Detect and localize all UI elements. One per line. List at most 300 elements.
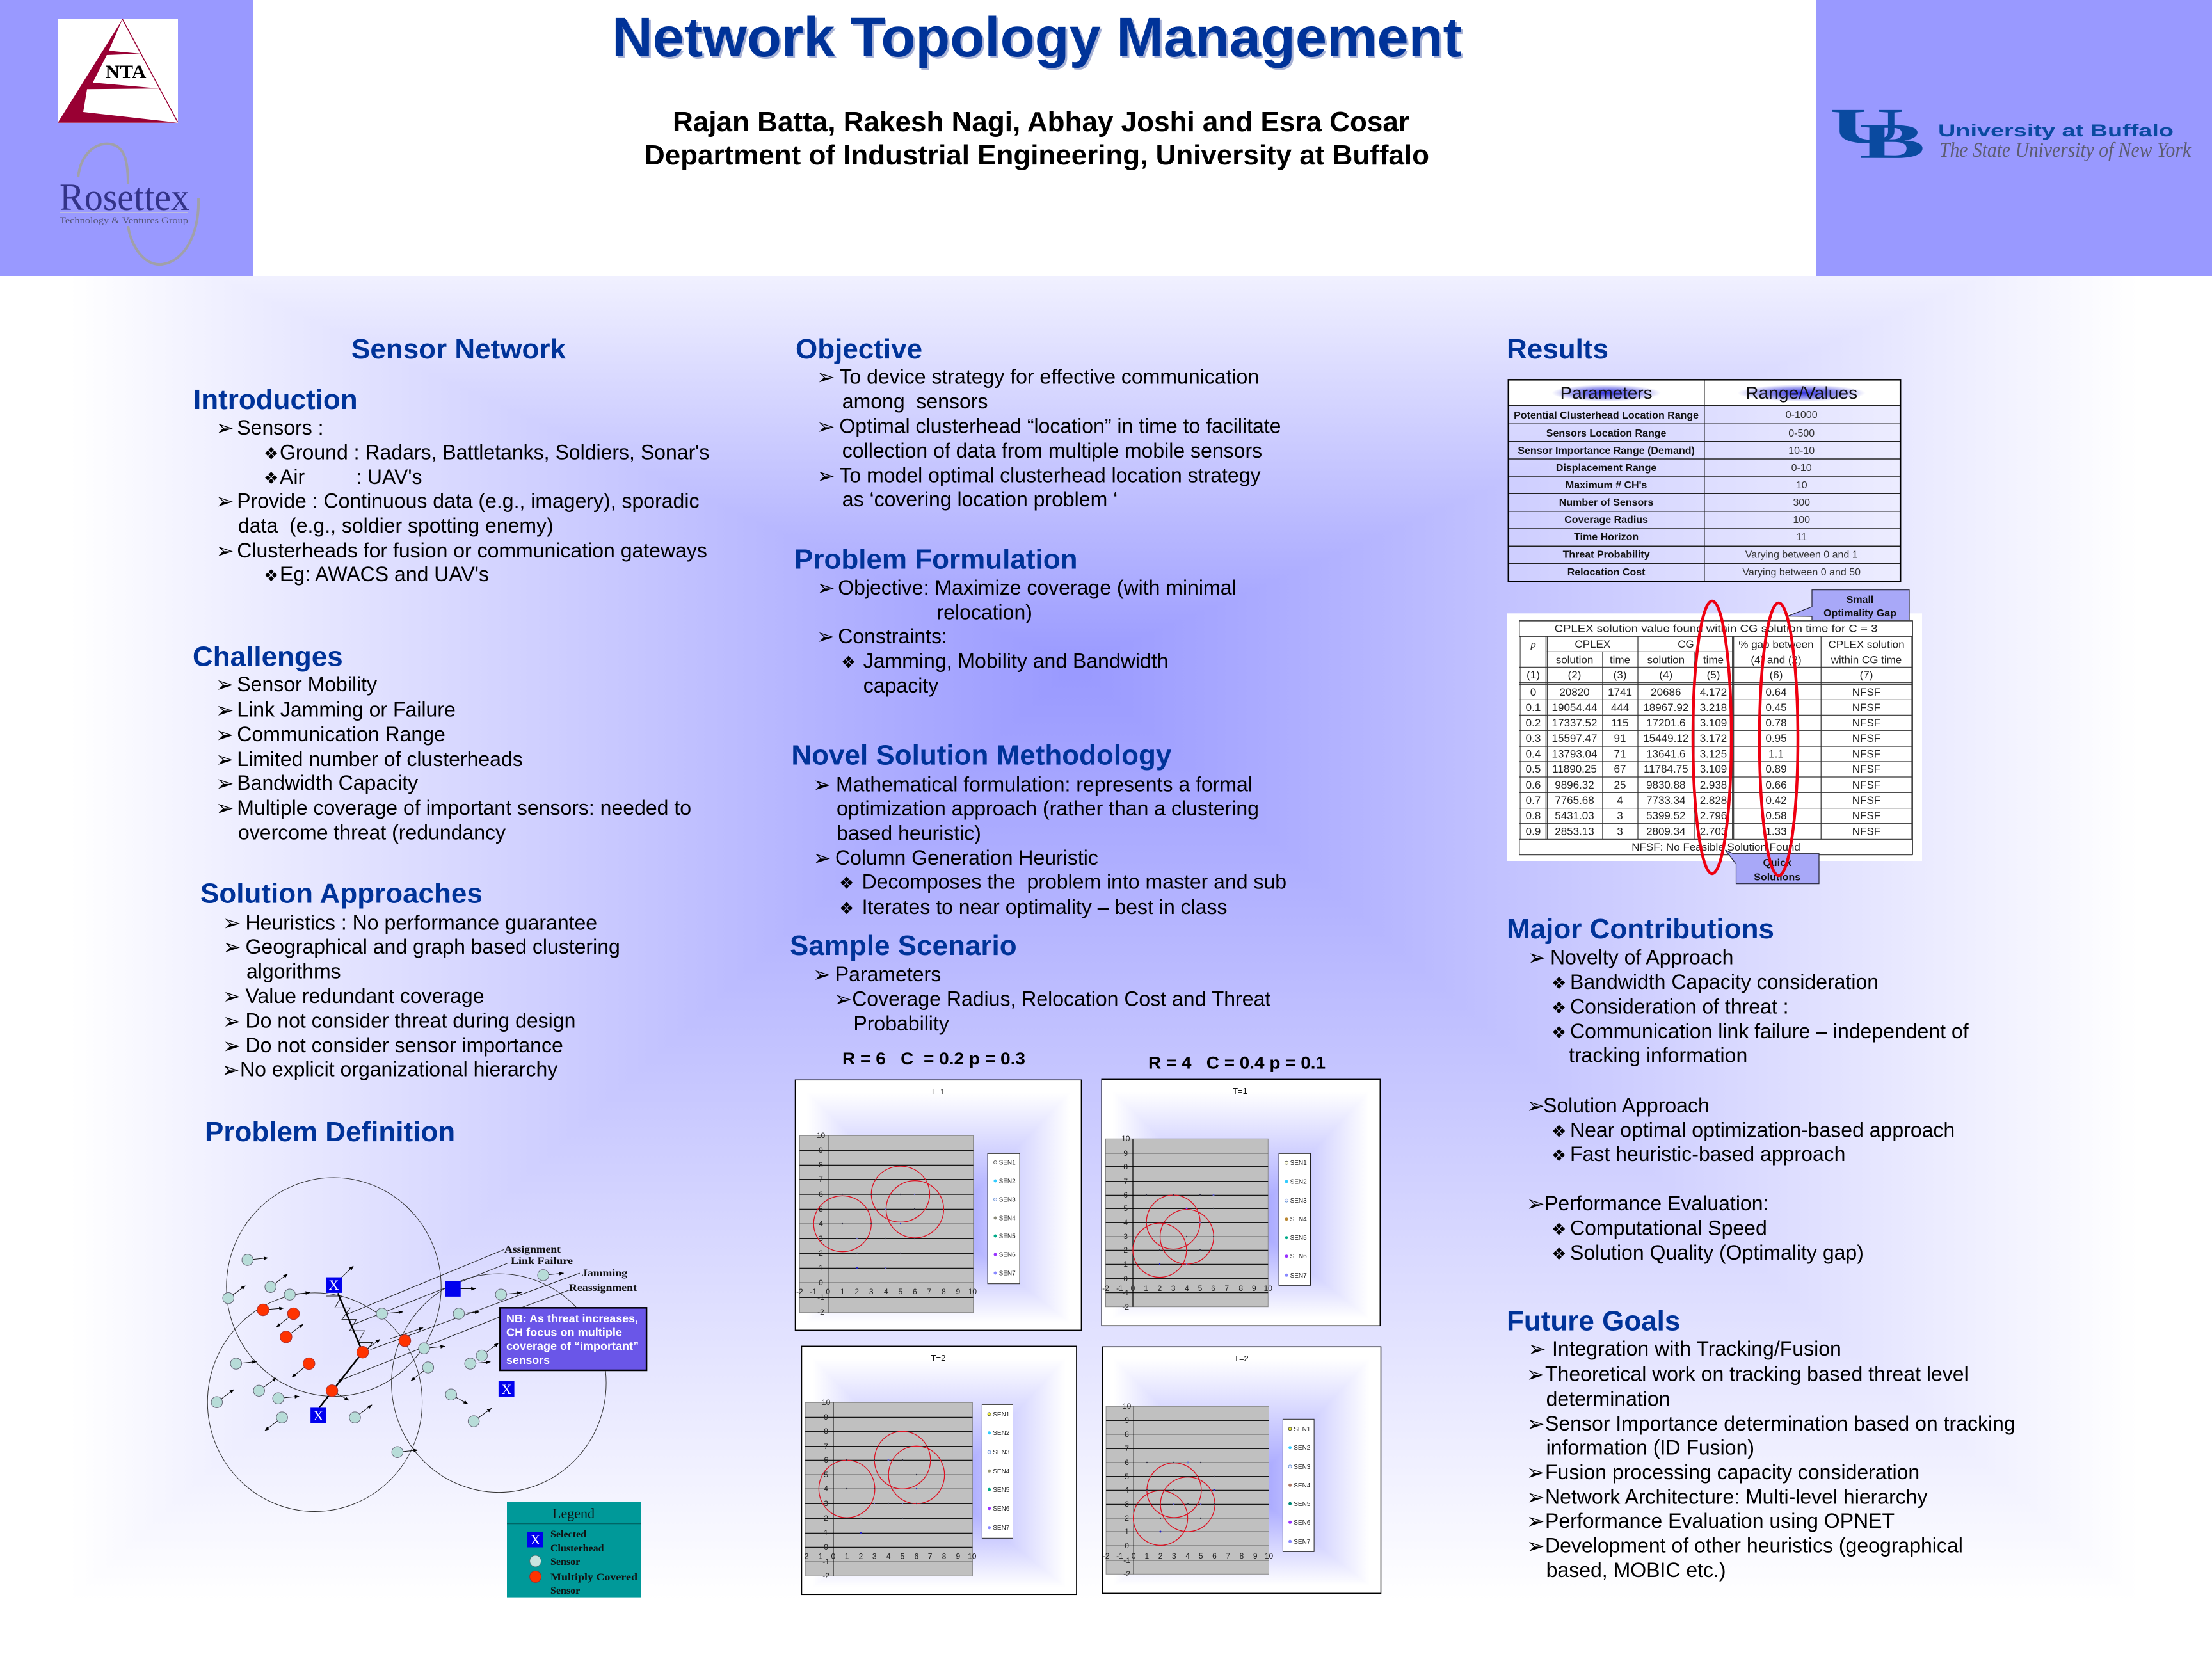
heading: Sample Scenario: Sample Scenario: [790, 930, 1017, 961]
text block: objective: ➢: [817, 365, 835, 390]
text block: problem formulation: relocation): [937, 601, 1032, 624]
legend: Multiply Covered: [550, 1572, 637, 1583]
chart: T=2 left: SEN1: [993, 1411, 1010, 1418]
chart: T=2 left: -1: [816, 1551, 823, 1560]
text block: solution approaches: algorithms: [246, 960, 341, 983]
text block: objective: among sensors: [842, 390, 988, 413]
chart: T=1 right: 3: [1123, 1232, 1128, 1241]
chart: T=1 right: 0: [1123, 1274, 1128, 1283]
legend: Clusterhead: [550, 1543, 604, 1554]
text block: objective: ➢: [817, 463, 835, 489]
heading: Future Goals: Future Goals: [1507, 1306, 1680, 1336]
chart: T=1 right: 10: [1264, 1284, 1272, 1293]
table: CPLEX vs CG results: NFSF: [1852, 763, 1880, 775]
text block: solution approaches: [221, 911, 620, 1083]
table: parameters: 0-10: [1791, 463, 1812, 474]
chart: T=1 right: SEN7: [1290, 1272, 1307, 1279]
text block: challenges: ➢: [216, 672, 234, 698]
table: CPLEX vs CG results: NFSF: [1852, 717, 1880, 729]
table: CPLEX vs CG results: 11890.25: [1552, 763, 1597, 775]
table: CPLEX vs CG results: 3.172: [1700, 732, 1727, 744]
table: CPLEX vs CG results: 17201.6: [1646, 717, 1686, 729]
table: CPLEX vs CG results: 1741: [1608, 686, 1632, 698]
text block: objective: To model optimal clusterhead location strategy: [839, 464, 1261, 487]
chart: T=2 right: 0: [1132, 1551, 1136, 1560]
text block: major contributions: Novelty of Approach: [1550, 945, 1733, 968]
text block: solution approaches: Geographical and graph based clustering: [246, 935, 620, 958]
chart: T=1 right: 7: [1123, 1177, 1128, 1186]
chart: T=2 right: 2: [1158, 1551, 1163, 1560]
table: parameters: [1509, 380, 1900, 581]
text block: future goals: Development of other heuristics (geographical: [1545, 1534, 1963, 1557]
highlight oval: optimality gap column: [1759, 603, 1798, 876]
text block: major contributions: [1527, 945, 1969, 1264]
table: parameters: Time Horizon: [1574, 532, 1639, 543]
chart: T=2 right: 9: [1253, 1551, 1258, 1560]
chart: T=1 left: 7: [819, 1174, 823, 1183]
table: CPLEX vs CG results: 13793.04: [1552, 748, 1597, 760]
chart: T=2 left: 6: [824, 1455, 828, 1464]
text block: introduction: data (e.g., soldier spotting enemy): [238, 514, 554, 537]
text block: introduction: ❖: [264, 566, 278, 586]
chart: T=1 right: 5: [1123, 1204, 1128, 1213]
table: CPLEX vs CG results: (7): [1860, 669, 1873, 681]
chart: T=2 right: 6: [1212, 1551, 1217, 1560]
icon: Rosettex logo: Rosettex: [60, 176, 189, 218]
chart: T=1 right: 2: [1123, 1246, 1128, 1254]
table: CPLEX vs CG results: NFSF: [1852, 701, 1880, 714]
chart: T=1 right: 6: [1211, 1284, 1215, 1293]
text block: novel solution methodology: ➢: [813, 773, 831, 798]
table: CPLEX vs CG results: 3.109: [1700, 717, 1727, 729]
text block: problem formulation: Objective: Maximize coverage (with minimal: [838, 576, 1237, 599]
icon: University at Buffalo logo: U: [1829, 98, 1905, 154]
chart: T=2 left: 8: [942, 1551, 947, 1560]
chart: T=1 left: -2: [796, 1287, 803, 1296]
chart: T=1 left: SEN6: [999, 1252, 1016, 1258]
chart: T=2 left: 1: [845, 1551, 849, 1560]
text block: solution approaches: ➢: [223, 984, 241, 1009]
diagram: sensor network problem definition: Reassignment: [569, 1283, 637, 1294]
table: CPLEX vs CG results: 0: [1530, 686, 1536, 698]
chart: T=2 right: 10: [1123, 1402, 1132, 1411]
table: CPLEX vs CG results: 7733.34: [1646, 794, 1686, 806]
table: CPLEX vs CG results: 0.3: [1526, 732, 1541, 744]
text block: introduction: ❖: [264, 444, 278, 463]
text block: novel solution methodology: optimization approach (rather than a clustering: [837, 797, 1259, 820]
table: CPLEX vs CG results: 1.1: [1768, 748, 1784, 760]
text block: novel solution methodology: ❖: [839, 899, 854, 918]
table: CPLEX vs CG results: (5): [1707, 669, 1720, 681]
chart: T=2 left: [801, 1346, 1077, 1594]
chart: T=2 left: 6: [915, 1551, 919, 1560]
table: CPLEX vs CG results: solution: [1647, 654, 1685, 666]
text block: sample scenario: Coverage Radius, Relocation Cost and Threat: [852, 987, 1270, 1010]
chart: T=2 right: T=2: [1234, 1354, 1249, 1363]
chart: T=2 left: 10: [968, 1551, 977, 1560]
chart: T=2 right: [1102, 1347, 1381, 1593]
chart: T=2 right: SEN6: [1294, 1519, 1311, 1527]
heading: Problem Definition: Problem Definition: [205, 1116, 455, 1148]
text block: major contributions: Solution Quality (Optimality gap): [1570, 1241, 1864, 1264]
chart: T=1 left: 4: [884, 1287, 888, 1296]
table: CPLEX vs CG results: 5399.52: [1646, 810, 1686, 822]
table: parameters: Range/Values: [1745, 383, 1857, 403]
table: parameters: Relocation Cost: [1567, 567, 1646, 578]
chart: T=1 right: -2: [1122, 1302, 1129, 1311]
chart: T=2 right: 7: [1125, 1444, 1129, 1453]
legend: Sensor: [550, 1557, 580, 1567]
text block: solution approaches: Do not consider sensor importance: [246, 1034, 563, 1057]
table: CPLEX vs CG results: 9896.32: [1555, 779, 1594, 791]
text block: future goals: ➢: [1528, 1336, 1546, 1362]
text block: challenges: Multiple coverage of important sensors: needed to: [237, 796, 691, 819]
chart: T=1 right: SEN3: [1290, 1198, 1307, 1205]
table: CPLEX vs CG results: 3: [1617, 810, 1623, 822]
text block: major contributions: Performance Evaluation:: [1544, 1192, 1768, 1215]
chart: T=2 left: 4: [886, 1551, 891, 1560]
table: parameters: Threat Probability: [1563, 549, 1650, 561]
chart: T=1 right: 9: [1123, 1149, 1128, 1158]
table: parameters: Parameters: [1560, 383, 1653, 403]
chart: T=1 right: -1: [1116, 1284, 1123, 1293]
table: CPLEX vs CG results: % gap between: [1738, 639, 1814, 650]
text block: problem formulation: capacity: [863, 674, 938, 697]
text block: major contributions: ➢: [1527, 1093, 1545, 1119]
chart: T=1 left: SEN4: [999, 1215, 1016, 1222]
table: CPLEX vs CG results: time: [1703, 654, 1724, 666]
text block: problem formulation: Jamming, Mobility and Bandwidth: [863, 650, 1168, 673]
text block: future goals: Integration with Tracking/Fusion: [1552, 1337, 1841, 1360]
panel: left logo header: [0, 0, 253, 276]
table: CPLEX vs CG results: 25: [1614, 779, 1626, 791]
chart: T=2 left: 1: [824, 1528, 828, 1537]
table: CPLEX vs CG results: 0.1: [1526, 701, 1541, 714]
callout: threat note: CH focus on multiple: [506, 1326, 622, 1339]
text block: challenges: Communication Range: [237, 723, 445, 746]
chart: T=2 left: -1: [822, 1557, 830, 1566]
table: CPLEX vs CG results: 0.42: [1765, 794, 1787, 806]
text block: introduction: Eg: AWACS and UAV's: [280, 563, 489, 586]
text block: future goals: ➢: [1527, 1362, 1545, 1388]
text block: future goals: based, MOBIC etc.): [1546, 1559, 1726, 1582]
chart: T=2 left: 5: [901, 1551, 905, 1560]
chart: T=2 left: 8: [824, 1427, 828, 1436]
text block: problem formulation: ➢: [817, 624, 835, 650]
chart: T=2 right: 8: [1125, 1430, 1129, 1439]
table: CPLEX vs CG results: CG: [1678, 638, 1694, 650]
text block: sample scenario: ➢: [813, 962, 831, 988]
icon: NTA logo: [58, 19, 178, 123]
chart: T=1 left: 2: [854, 1287, 859, 1296]
text block: future goals: ➢: [1527, 1485, 1545, 1511]
chart: T=1 right: 0: [1131, 1284, 1135, 1293]
callout: quick solutions: Quick: [1763, 858, 1791, 869]
text block: introduction: [216, 415, 709, 586]
text block: solution approaches: Heuristics : No performance guarantee: [246, 911, 597, 934]
diagram: sensor network problem definition: Jamming: [582, 1268, 627, 1279]
table: CPLEX vs CG results: 0.4: [1526, 748, 1541, 760]
chart: T=1 left: 10: [817, 1131, 825, 1140]
text block: major contributions: ❖: [1551, 1146, 1566, 1166]
icon: University at Buffalo logo: The State University of New York: [1939, 139, 2192, 162]
chart: T=1 right: -1: [1122, 1288, 1129, 1297]
chart: T=1 right: SEN6: [1290, 1253, 1307, 1260]
legend: Selected: [550, 1529, 586, 1540]
icon: Rosettex logo: [60, 144, 198, 264]
chart: T=1 right: 6: [1123, 1190, 1128, 1199]
text block: major contributions: Fast heuristic-based approach: [1570, 1142, 1845, 1166]
diagram: sensor network problem definition: [207, 1178, 646, 1598]
text block: novel solution methodology: based heuristic): [837, 822, 981, 845]
chart: T=1 right: -2: [1102, 1284, 1109, 1293]
table: CPLEX vs CG results: 91: [1614, 732, 1626, 744]
table: CPLEX vs CG results: NFSF: [1852, 732, 1880, 744]
table: parameters: 300: [1793, 497, 1810, 508]
text block: future goals: Network Architecture: Multi-level hierarchy: [1545, 1485, 1928, 1508]
chart: T=2 right: 8: [1240, 1551, 1244, 1560]
chart: T=2 right: 7: [1226, 1551, 1230, 1560]
text block: introduction: ➢: [216, 489, 234, 515]
table: CPLEX vs CG results: 0.45: [1765, 701, 1787, 714]
text block: challenges: Link Jamming or Failure: [237, 698, 456, 721]
chart: T=2 left: 2: [859, 1551, 863, 1560]
callout: quick solutions: Solutions: [1754, 872, 1800, 883]
icon: University at Buffalo logo: University at Buffalo: [1938, 121, 2174, 140]
chart: T=2 right: -2: [1123, 1569, 1130, 1578]
chart: T=1 left: 1: [819, 1263, 823, 1272]
chart: T=2 left: SEN7: [993, 1525, 1010, 1532]
icon: University at Buffalo logo: [1829, 98, 2192, 169]
table: parameters: Varying between 0 and 1: [1745, 549, 1858, 561]
chart: T=2 left: SEN6: [993, 1505, 1010, 1512]
table: parameters: 100: [1793, 515, 1810, 525]
chart: T=1 left: 3: [869, 1287, 874, 1296]
text block: major contributions: Computational Speed: [1570, 1217, 1767, 1240]
text block: sample scenario: Parameters: [835, 963, 941, 986]
chart: T=2 right: 3: [1125, 1500, 1129, 1509]
text block: solution approaches: Do not consider threat during design: [246, 1009, 575, 1032]
table: CPLEX vs CG results: time: [1610, 654, 1630, 666]
chart: T=1 left: SEN3: [999, 1197, 1016, 1203]
chart: T=2 right: -1: [1116, 1551, 1123, 1560]
chart: T=1 left: 10: [968, 1287, 977, 1296]
table: CPLEX vs CG results: 9830.88: [1646, 779, 1686, 791]
table: CPLEX vs CG results: NFSF: [1852, 779, 1880, 791]
diagram: sensor network problem definition: X: [329, 1277, 339, 1293]
table: parameters: Varying between 0 and 50: [1742, 567, 1861, 578]
chart: T=1 left: [795, 1080, 1081, 1330]
text block: challenges: ➢: [216, 747, 234, 773]
chart: T=1 right: SEN5: [1290, 1235, 1307, 1242]
chart: T=1 left: 8: [819, 1160, 823, 1169]
chart: T=1 right: 9: [1252, 1284, 1256, 1293]
legend: Legend: [552, 1505, 595, 1521]
chart: T=2 right: SEN1: [1294, 1426, 1311, 1433]
diagram: sensor network problem definition: Assignment: [504, 1244, 561, 1255]
diagram: sensor network problem definition: Link Failure: [511, 1256, 573, 1267]
chart caption left: R = 6 C = 0.2 p = 0.3: [842, 1049, 1025, 1068]
heading: Major Contributions: Major Contributions: [1507, 913, 1774, 945]
table: parameters: Potential Clusterhead Location Range: [1514, 410, 1699, 421]
text block: challenges: Bandwidth Capacity: [237, 771, 418, 794]
diagram: sensor network problem definition: X: [313, 1407, 323, 1423]
text block: major contributions: Communication link failure – independent of: [1570, 1020, 1969, 1043]
chart: T=2 right: SEN7: [1294, 1539, 1311, 1546]
table: CPLEX vs CG results: 2.703: [1700, 826, 1727, 837]
chart: T=1 right: 3: [1171, 1284, 1176, 1293]
text block: future goals: Theoretical work on tracking based threat level: [1545, 1363, 1969, 1386]
text block: future goals: information (ID Fusion): [1546, 1436, 1754, 1459]
chart: T=2 right: 6: [1125, 1458, 1129, 1467]
text block: challenges: Limited number of clusterheads: [237, 748, 523, 771]
chart: T=2 right: 4: [1125, 1486, 1129, 1495]
table: CPLEX vs CG results: 0.58: [1765, 810, 1787, 822]
chart: T=2 left: 0: [831, 1551, 836, 1560]
text block: challenges: [216, 672, 691, 844]
table: CPLEX vs CG results: 0.7: [1526, 794, 1541, 806]
chart: T=1 right: 1: [1123, 1260, 1128, 1269]
text block: major contributions: ❖: [1551, 999, 1566, 1018]
icon: NTA logo: NTA: [105, 61, 147, 83]
table: CPLEX vs CG results: 0.2: [1526, 717, 1541, 729]
table: CPLEX vs CG results: 0.5: [1526, 763, 1541, 775]
chart: T=2 right: 10: [1265, 1551, 1273, 1560]
icon: University at Buffalo logo: B: [1859, 113, 1925, 169]
text block: problem formulation: ❖: [841, 653, 856, 673]
text block: major contributions: Solution Approach: [1543, 1094, 1710, 1117]
table: CPLEX vs CG results: within CG time: [1831, 654, 1902, 666]
text block: major contributions: ❖: [1551, 1245, 1566, 1264]
table: CPLEX vs CG results: 71: [1614, 748, 1626, 760]
chart: T=2 left: 3: [872, 1551, 877, 1560]
legend: [507, 1502, 641, 1598]
authors and department: Department of Industrial Engineering, University at Buffalo: [645, 140, 1429, 171]
callout: threat note: NB: As threat increases,: [506, 1312, 638, 1325]
callout: small optimality gap: Small: [1847, 595, 1873, 605]
table: CPLEX vs CG results: [1507, 613, 1922, 861]
chart caption right: R = 4 C = 0.4 p = 0.1: [1148, 1054, 1326, 1073]
chart: T=2 right: 2: [1125, 1514, 1129, 1523]
chart: T=2 left: T=2: [931, 1353, 945, 1363]
table: CPLEX vs CG results: 115: [1611, 717, 1629, 729]
table: CPLEX vs CG results: 444: [1611, 701, 1629, 714]
text block: challenges: ➢: [216, 796, 234, 821]
table: CPLEX vs CG results: NFSF: [1852, 826, 1880, 837]
text block: solution approaches: No explicit organizational hierarchy: [240, 1058, 557, 1081]
table: parameters: Coverage Radius: [1564, 515, 1648, 525]
callout: small optimality gap: [1788, 590, 1909, 620]
text block: major contributions: ❖: [1551, 974, 1566, 993]
chart: T=2 right: SEN5: [1294, 1501, 1311, 1508]
table: CPLEX vs CG results: 5431.03: [1555, 810, 1594, 822]
table: CPLEX vs CG results: NFSF: [1852, 748, 1880, 760]
text block: future goals: ➢: [1527, 1509, 1545, 1534]
table: CPLEX vs CG results: 19054.44: [1552, 701, 1597, 714]
table: parameters: 11: [1796, 532, 1807, 543]
chart: T=2 left: 0: [824, 1543, 828, 1551]
text block: problem formulation: [817, 575, 1237, 697]
chart: T=1 left: 0: [819, 1278, 823, 1287]
text block: sample scenario: [813, 962, 1270, 1035]
text block: solution approaches: ➢: [223, 1009, 241, 1034]
chart: T=2 left: 7: [824, 1442, 828, 1451]
text block: objective: To device strategy for effective communication: [839, 365, 1259, 388]
diagram: sensor network problem definition: X: [502, 1381, 512, 1397]
chart: T=2 left: 4: [824, 1484, 828, 1493]
chart: T=1 left: 8: [942, 1287, 946, 1296]
table: CPLEX vs CG results: solution: [1556, 654, 1593, 666]
chart: T=1 right: 2: [1158, 1284, 1162, 1293]
chart: T=2 left: -2: [822, 1571, 830, 1580]
chart: T=1 left: 4: [819, 1219, 823, 1228]
table: CPLEX vs CG results: (2): [1568, 669, 1581, 681]
table: CPLEX vs CG results: 67: [1614, 763, 1626, 775]
callout: quick solutions: [1726, 850, 1819, 884]
chart: T=2 left: 5: [824, 1470, 828, 1479]
table: CPLEX vs CG results: 0.66: [1765, 779, 1787, 791]
table: CPLEX vs CG results: 20686: [1651, 686, 1681, 698]
chart: T=2 left: -2: [802, 1551, 809, 1560]
chart: T=1 left: -1: [810, 1287, 817, 1296]
text block: novel solution methodology: ➢: [813, 846, 831, 871]
chart: T=2 left: 9: [956, 1551, 961, 1560]
chart: T=2 left: 7: [928, 1551, 933, 1560]
heading: Solution Approaches: Solution Approaches: [200, 878, 483, 910]
text block: challenges: overcome threat (redundancy: [238, 821, 506, 844]
heading: Objective: Objective: [796, 333, 922, 365]
table: CPLEX vs CG results: 0.6: [1526, 779, 1541, 791]
heading: Problem Formulation: Problem Formulation: [794, 543, 1077, 575]
heading: Novel Solution Methodology: Novel Solution Methodology: [791, 740, 1172, 771]
text block: novel solution methodology: [813, 773, 1286, 918]
text block: objective: collection of data from multiple mobile sensors: [842, 439, 1262, 462]
table: CPLEX vs CG results: 20820: [1559, 686, 1590, 698]
table: CPLEX vs CG results: (6): [1770, 669, 1783, 681]
text block: major contributions: ➢: [1527, 1191, 1545, 1217]
chart: T=1 right: 4: [1185, 1284, 1189, 1293]
table: CPLEX vs CG results: 2853.13: [1555, 826, 1594, 837]
chart: T=1 left: SEN1: [999, 1160, 1016, 1166]
chart: T=2 left: 10: [822, 1398, 831, 1407]
table: CPLEX vs CG results: 17337.52: [1552, 717, 1597, 729]
table: CPLEX vs CG results: 2.938: [1700, 779, 1727, 791]
chart: T=1 right: 10: [1121, 1134, 1130, 1143]
title: Network Topology Management: [614, 8, 1464, 70]
text block: major contributions: tracking information: [1569, 1044, 1747, 1067]
text block: introduction: Clusterheads for fusion or communication gateways: [237, 539, 707, 562]
chart: T=1 right: 8: [1238, 1284, 1243, 1293]
text block: future goals: [1527, 1336, 2016, 1582]
text block: introduction: ➢: [216, 538, 234, 564]
table: parameters: 10-10: [1788, 445, 1815, 456]
text block: solution approaches: ➢: [223, 934, 241, 960]
legend: Sensor: [550, 1585, 580, 1596]
text block: major contributions: Bandwidth Capacity consideration: [1570, 970, 1879, 993]
icon: Rosettex logo: Technology & Ventures Group: [60, 216, 188, 226]
table: CPLEX vs CG results: (3): [1614, 669, 1626, 681]
text block: major contributions: ❖: [1551, 1221, 1566, 1240]
text block: introduction: Provide : Continuous data (e.g., imagery), sporadic: [237, 489, 699, 512]
text block: major contributions: ❖: [1551, 1122, 1566, 1141]
text block: novel solution methodology: Iterates to near optimality – best in class: [862, 895, 1228, 918]
chart: T=2 left: 9: [824, 1413, 828, 1422]
text block: challenges: ➢: [216, 698, 234, 723]
text block: future goals: Sensor Importance determination based on tracking: [1545, 1412, 2016, 1435]
table: parameters: 10: [1796, 480, 1807, 491]
text block: challenges: ➢: [216, 722, 234, 748]
title: Network Topology Management: [612, 6, 1462, 68]
